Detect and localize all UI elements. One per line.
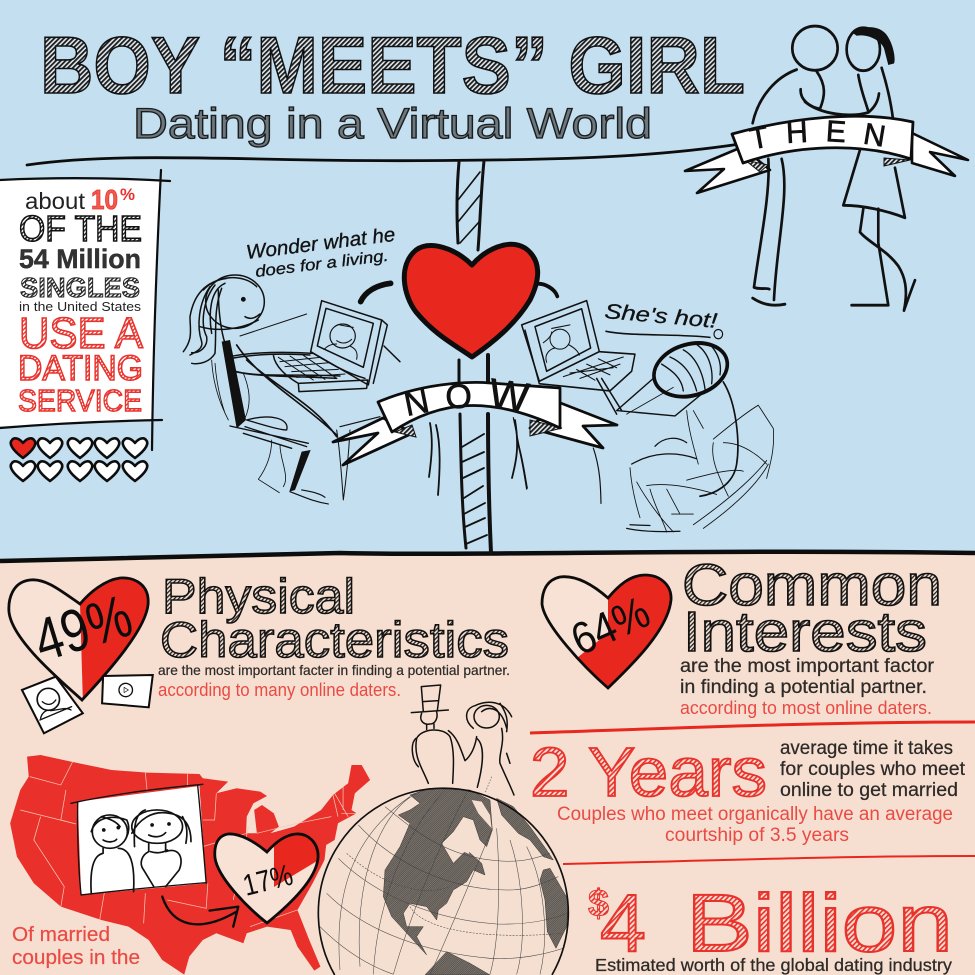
heading: physical characteristics: Characteristics — [160, 612, 509, 668]
text: organic courtship comparison: Couples who meet organically have an average — [557, 804, 953, 825]
icon: profile photo — [22, 677, 83, 733]
text: physical characteristics detail: are the most important facter in finding a potential partner. — [158, 662, 510, 678]
subtitle: Dating in a Virtual World — [133, 100, 652, 148]
big red heart — [404, 244, 538, 357]
panel: 10 percent stat: DATING — [18, 349, 143, 388]
text: estimated worth: Estimated worth of the global dating industry — [595, 955, 952, 975]
text: of married couples — [12, 924, 140, 969]
panel: 10 percent stat: % — [120, 185, 135, 204]
illustration: woman at laptop — [183, 275, 400, 504]
text: of married couples: couples in the — [12, 947, 140, 969]
title: BOY “MEETS” GIRL — [40, 21, 745, 111]
panel: 10 percent stat: OF THE — [19, 208, 142, 249]
one in ten hearts pictogram — [11, 438, 147, 481]
header divider line — [27, 144, 740, 165]
panel: 10 percent stat: SERVICE — [18, 383, 142, 418]
then banner: THEN — [748, 120, 885, 148]
text: physical characteristics detail: according to many online daters. — [158, 680, 401, 700]
text: 2 years detail — [780, 738, 966, 801]
globe — [318, 788, 568, 975]
speech: she's hot: She's hot! — [604, 300, 718, 333]
photo: online couple — [71, 784, 206, 895]
speech accent right — [536, 284, 557, 296]
text: common interests detail: are the most important factor — [680, 656, 935, 677]
text: organic courtship comparison — [557, 804, 953, 846]
then banner — [684, 114, 970, 194]
text: common interests detail: according to most online daters. — [680, 698, 932, 718]
illustration: bride and groom — [411, 685, 514, 795]
heart chart: 64 percent — [540, 574, 672, 690]
panel: 10 percent stat: USE A — [19, 309, 144, 358]
stat: 4 billion: $ — [588, 883, 609, 925]
globe grid lines — [320, 788, 567, 974]
red divider — [530, 722, 975, 733]
illustration: man at laptop — [513, 284, 774, 532]
globe land masses — [383, 788, 568, 975]
pole connecting then and now — [457, 161, 491, 553]
text: 2 years detail: online to get married — [780, 780, 958, 801]
blue background: then and now panel — [0, 0, 975, 560]
panel: 10 percent stat: SINGLES — [20, 272, 140, 303]
illustration: then couple — [753, 26, 915, 311]
text: of married couples: Of married — [12, 924, 110, 946]
heading: common interests — [682, 553, 942, 664]
peach background: statistics panel — [0, 552, 975, 975]
heart chart: 49 percent — [9, 570, 155, 705]
text: 2 years detail: for couples who meet — [780, 759, 966, 780]
now banner hair and tails: NOW — [404, 378, 531, 416]
text: 2 years detail: average time it takes — [780, 738, 953, 759]
heading: common interests: Interests — [683, 600, 927, 664]
left laptop screen with man's face — [311, 301, 400, 385]
panel: 10 percent stat: 10 — [91, 184, 118, 215]
text: physical characteristics detail — [158, 662, 510, 700]
speech: wonder what he does for a living — [245, 224, 396, 281]
stat text: about 10%: about — [25, 188, 86, 214]
heading: physical characteristics — [160, 570, 509, 668]
heart chart: 49 percent: 49% — [26, 582, 140, 674]
text: common interests detail — [680, 656, 935, 718]
panel: 10 percent stat: in the United States — [19, 299, 142, 314]
heart chart: 64 percent: 64% — [563, 586, 657, 665]
panel: 10 percent stat: 54 Million — [19, 244, 141, 274]
stat: 4 billion — [588, 878, 953, 969]
speech: wonder what he does for a living: does for a living. — [254, 248, 389, 281]
red divider — [563, 856, 975, 864]
arrow from couple to heart — [162, 897, 238, 927]
now banner hair and tails — [332, 378, 618, 496]
text: common interests detail: in finding a potential partner. — [680, 677, 927, 698]
text: organic courtship comparison: courtship of 3.5 years — [665, 825, 849, 846]
panel: 10 percent stat — [0, 170, 170, 450]
heading: physical characteristics: Physical — [162, 570, 355, 624]
heart chart: 17 percent: 17% — [240, 859, 296, 903]
speech: wonder what he does for a living: Wonder what he — [245, 224, 396, 264]
icon: video card — [102, 675, 153, 707]
heart chart: 17 percent — [215, 830, 322, 923]
map: united states — [10, 755, 370, 975]
heading: common interests: Common — [682, 553, 942, 618]
stat: 4 billion: Billion — [686, 878, 953, 969]
stat: 4 billion: 4 — [600, 878, 646, 969]
stat: 2 years: 2 Years — [530, 733, 767, 811]
speech accent left — [361, 283, 391, 302]
